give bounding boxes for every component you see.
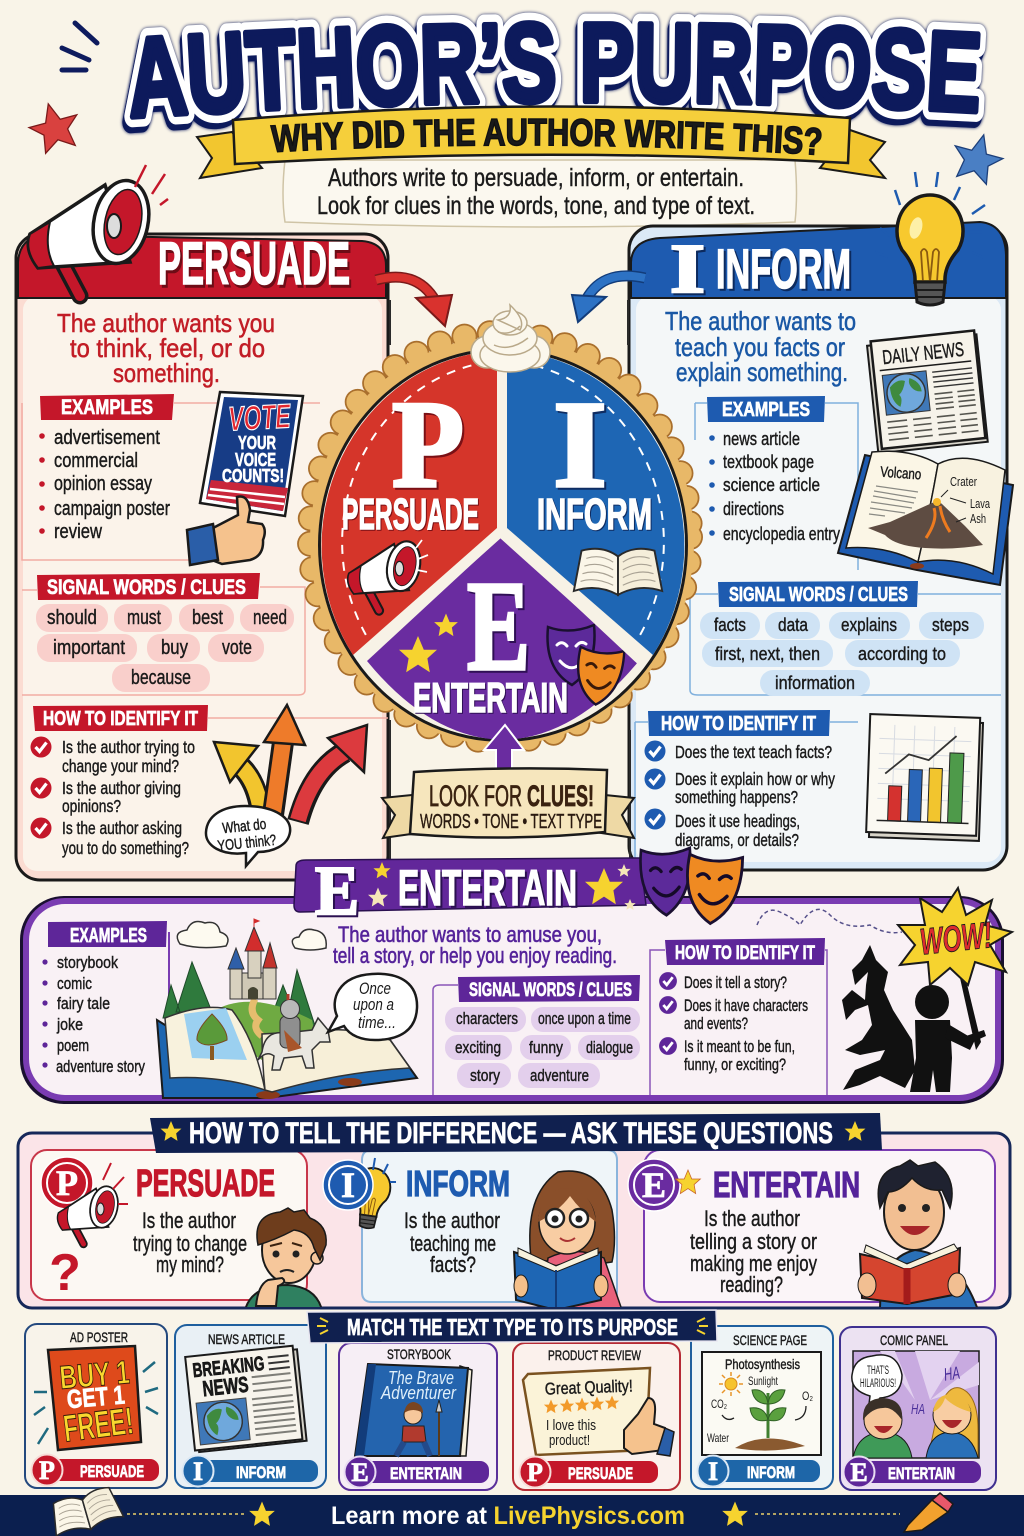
icon: theatre masks <box>640 848 743 926</box>
reading boy <box>858 1160 978 1310</box>
entertain examples list: poem <box>57 1036 89 1055</box>
title: AUTHOR’S PURPOSE <box>120 10 989 136</box>
speech bubble: what do you think <box>206 806 290 866</box>
persuade signal pills: best <box>192 607 223 629</box>
comic illustration <box>852 1351 979 1458</box>
intro text box: Look for clues in the words, tone, and type of text. <box>317 192 755 220</box>
photosynthesis illustration: Photosynthesis <box>725 1356 800 1372</box>
title: AUTHOR’S PURPOSE <box>130 20 981 120</box>
badge: E <box>642 1165 666 1205</box>
photosynthesis illustration: Sunlight <box>748 1374 778 1388</box>
pie dividers <box>360 380 642 664</box>
entertain examples list: joke <box>56 1015 83 1034</box>
vote poster: VOICE <box>235 450 276 470</box>
icon: star right <box>722 1502 748 1526</box>
reading girl <box>514 1171 622 1310</box>
newspaper illustration: NEWS <box>201 1372 250 1401</box>
how to identify tag <box>648 710 830 736</box>
inform signal pills: facts <box>714 614 746 635</box>
icon: pie open book <box>574 549 662 595</box>
icon: whipped cream <box>471 305 550 372</box>
slice: entertain <box>367 538 638 740</box>
inform examples list: encyclopedia entry <box>723 523 841 544</box>
inform signal pills: first, next, then <box>715 643 820 664</box>
banner: match the text type <box>307 1310 717 1343</box>
inform examples list: news article <box>723 428 800 449</box>
icon: bulb <box>349 1158 396 1231</box>
signal tag: SIGNAL WORDS / CLUES <box>469 979 632 1001</box>
persuade description: The author wants you <box>57 308 275 338</box>
check icons <box>659 972 677 1055</box>
badge: I <box>341 1165 355 1205</box>
silhouette: dragon and child <box>842 945 986 1092</box>
questions <box>62 737 195 858</box>
persuade examples list: opinion essay <box>54 473 152 495</box>
vote poster: YOUR <box>238 433 276 453</box>
questions: Does it tell a story? <box>684 974 787 992</box>
persuade signal pills <box>36 604 294 692</box>
heading: PERSUADE <box>136 1163 275 1205</box>
persuade signal pills: buy <box>161 637 188 659</box>
pie crust <box>310 333 694 745</box>
badge: inform <box>698 1456 820 1486</box>
comic kids <box>853 1432 912 1458</box>
ad poster illustration: BUY 1 <box>58 1353 131 1396</box>
knight on horse <box>258 994 330 1070</box>
icon: clouds <box>177 922 326 950</box>
storybook with castle and knight <box>157 919 417 1099</box>
comic illustration: HA <box>943 1363 961 1385</box>
question text: Is the author <box>704 1206 800 1231</box>
questions: Does the text teach facts? <box>675 742 832 762</box>
persuade description: to think, feel, or do <box>70 333 265 363</box>
badge: entertain <box>844 1456 981 1488</box>
card: science page: SCIENCE PAGE <box>733 1332 807 1348</box>
card: comic panel: COMIC PANEL <box>880 1332 948 1348</box>
inform description: explain something. <box>676 357 848 387</box>
card: ad poster <box>25 1324 167 1488</box>
persuade examples frame <box>22 403 320 560</box>
thinking boy <box>245 1208 326 1310</box>
icon: three direction arrows <box>214 705 367 822</box>
questions <box>675 742 835 850</box>
inform examples list: directions <box>723 498 784 519</box>
slice: entertain: E <box>467 555 530 697</box>
inform heading: I <box>670 231 705 308</box>
photosynthesis illustration <box>702 1352 821 1455</box>
inform examples list: textbook page <box>723 451 814 472</box>
speech bubble: once upon a time: upon a <box>353 995 394 1014</box>
badge: persuade: P <box>39 1456 55 1485</box>
inform signal tag <box>718 581 918 607</box>
thumbs up <box>624 1398 665 1454</box>
question text <box>690 1206 817 1297</box>
ad poster illustration: GET 1 <box>66 1379 126 1414</box>
slice: persuade <box>322 351 497 655</box>
persuade how to identify <box>30 705 388 858</box>
icon: megaphone <box>28 165 168 296</box>
panel: persuade <box>16 165 388 880</box>
persuade signal pills: must <box>127 607 161 629</box>
badge <box>628 1159 680 1211</box>
entertain examples list <box>42 953 145 1076</box>
card: product review: PRODUCT REVIEW <box>548 1347 642 1363</box>
speech bubble: once upon a time: time... <box>358 1013 396 1032</box>
icon: megaphone <box>58 1163 128 1244</box>
question text: making me enjoy <box>690 1251 817 1276</box>
tag: HOW TO IDENTIFY IT <box>675 943 815 964</box>
question text: Is the author <box>404 1208 500 1233</box>
panel: entertain <box>20 848 1012 1104</box>
questions: Is the author trying to <box>62 737 195 757</box>
inform description <box>665 306 856 387</box>
open book <box>157 1020 417 1098</box>
entertain header <box>294 858 646 912</box>
question text: trying to change <box>133 1231 247 1256</box>
inform signal pills <box>700 612 984 696</box>
storybook illustration: The Brave <box>388 1368 454 1388</box>
badge: inform: I <box>193 1457 203 1486</box>
footer text: Learn more at LivePhysics.com <box>331 1502 685 1530</box>
badge: entertain: E <box>351 1458 369 1487</box>
badge: inform: INFORM <box>236 1463 286 1482</box>
bar chart <box>866 714 983 841</box>
ribbon: why did the author write this <box>195 105 888 180</box>
speech bubble: what do you think: What do <box>222 816 267 837</box>
how to identify tag: HOW TO IDENTIFY IT <box>661 713 816 735</box>
questions <box>684 974 808 1074</box>
how to identify tag: HOW TO IDENTIFY IT <box>43 708 198 730</box>
persuade examples list: review <box>54 521 102 543</box>
inform heading <box>670 231 851 308</box>
questions: change your mind? <box>62 756 179 776</box>
persuade signal pills: because <box>131 667 191 689</box>
badge: persuade: PERSUADE <box>80 1462 144 1481</box>
slice: inform <box>507 351 684 655</box>
decorative sparks and stars <box>24 23 1008 187</box>
book illustration: volcano: Ash <box>970 512 986 526</box>
questions: Does it have characters <box>684 997 808 1015</box>
persuade signal box <box>22 573 305 695</box>
signal pills: adventure <box>530 1067 589 1085</box>
persuade description <box>57 308 275 388</box>
banner: how to tell the difference <box>150 1113 882 1153</box>
card: comic panel <box>840 1327 996 1490</box>
inform examples frame <box>695 403 858 570</box>
badge: entertain: ENTERTAIN <box>888 1464 955 1483</box>
signal pills: dialogue <box>586 1039 633 1057</box>
newspaper illustration: BREAKING <box>192 1353 265 1382</box>
question text: facts? <box>430 1252 476 1277</box>
icon: pencil <box>904 1493 953 1532</box>
question text <box>404 1208 500 1277</box>
newspaper illustration <box>185 1345 307 1452</box>
heading: ENTERTAIN <box>713 1164 860 1205</box>
entertain signal words <box>433 975 640 1095</box>
burst: wow <box>898 888 1012 985</box>
persuade examples list: campaign poster <box>54 498 170 520</box>
inform signal pills: explains <box>841 614 897 635</box>
arrow: up to pie <box>484 725 524 772</box>
how to identify tag <box>33 705 208 731</box>
entertain examples tag: EXAMPLES <box>70 925 147 947</box>
persuade examples list: advertisement <box>54 427 160 449</box>
castle <box>228 919 277 999</box>
intro text box: Authors write to persuade, inform, or entertain. <box>328 164 744 192</box>
review illustration: product! <box>549 1433 590 1449</box>
book illustration: volcano <box>838 451 1013 585</box>
badge: persuade <box>32 1454 159 1486</box>
inform heading: INFORM <box>716 237 851 300</box>
intro text box <box>283 160 796 227</box>
questions: Is it meant to be fun, <box>684 1038 795 1056</box>
icon: lightbulb <box>875 172 985 305</box>
vote poster: COUNTS! <box>222 466 284 486</box>
frame line <box>168 932 170 1010</box>
vote poster: VOTE <box>227 397 292 439</box>
questions: Is the author asking <box>62 818 182 838</box>
slice: persuade: PERSUADE <box>342 490 479 539</box>
inform signal pills: according to <box>858 643 946 664</box>
slice: inform: INFORM <box>537 490 652 539</box>
card: ad poster: AD POSTER <box>70 1329 128 1345</box>
questions: opinions? <box>62 796 121 816</box>
photosynthesis illustration: O₂ <box>802 1389 813 1403</box>
persuade signal pills: need <box>253 607 287 629</box>
book illustration: volcano: Lava <box>970 497 990 511</box>
persuade signal pills: vote <box>222 637 252 659</box>
questions: Is the author giving <box>62 778 181 798</box>
divider lines between panels <box>390 300 630 860</box>
card: inform question <box>323 1150 622 1310</box>
trees <box>163 962 318 1035</box>
entertain examples list: adventure story <box>56 1057 145 1076</box>
question mark: ? <box>49 1244 81 1302</box>
badge: inform: INFORM <box>747 1463 795 1482</box>
newspaper: daily news: DAILY NEWS <box>881 339 965 369</box>
entertain description: tell a story, or help you enjoy reading. <box>333 943 617 968</box>
questions: funny, or exciting? <box>684 1056 786 1074</box>
slice: persuade: P <box>392 376 464 513</box>
vote poster <box>200 392 303 516</box>
footer <box>0 1485 1024 1536</box>
entertain description <box>333 922 617 968</box>
persuade description: something. <box>113 358 220 388</box>
badge: persuade <box>520 1456 658 1488</box>
badge: persuade: P <box>527 1458 543 1487</box>
question text: teaching me <box>410 1231 496 1256</box>
panel: inform <box>629 172 1013 870</box>
icon: theatre masks <box>548 625 625 708</box>
badge <box>323 1160 373 1210</box>
inform signal box <box>690 581 1001 696</box>
comic illustration: HILARIOUS! <box>860 1378 896 1390</box>
signal pills <box>445 1007 640 1088</box>
check icons <box>644 740 666 830</box>
icon: star left <box>249 1502 275 1526</box>
speech bubble: once upon a time <box>328 974 417 1040</box>
inform header <box>631 222 1006 298</box>
card: news article <box>175 1325 326 1488</box>
book illustration: volcano: Volcano <box>880 464 922 483</box>
question text: telling a story or <box>690 1229 817 1254</box>
card: entertain question <box>628 1150 995 1310</box>
persuade signal pills: should <box>47 607 97 629</box>
badge: persuade: PERSUADE <box>568 1464 633 1483</box>
badge <box>41 1157 93 1209</box>
signal tag <box>458 975 640 1002</box>
dotted line right <box>755 1513 900 1515</box>
questions: Does it explain how or why <box>675 769 835 789</box>
panel: how to tell the difference <box>18 1133 1010 1310</box>
badge: entertain <box>344 1456 489 1488</box>
inform how to identify <box>635 710 858 860</box>
icon: star <box>676 1170 700 1194</box>
questions: you to do something? <box>62 838 189 858</box>
inform signal pills: data <box>778 614 809 635</box>
card: science page <box>691 1326 833 1489</box>
entertain how to identify <box>650 938 827 1095</box>
persuade heading: PERSUADE <box>158 230 350 297</box>
comic illustration: THAT'S <box>867 1365 889 1377</box>
inform signal pills: information <box>775 672 855 693</box>
card: storybook <box>339 1343 497 1490</box>
tag <box>665 938 825 965</box>
inform signal pills: steps <box>932 614 969 635</box>
questions: and events? <box>684 1015 748 1033</box>
questions: Does it use headings, <box>675 811 800 831</box>
signal pills: exciting <box>455 1039 501 1057</box>
newspaper: daily news <box>867 330 988 453</box>
question text: Is the author <box>142 1208 236 1233</box>
entertain examples list: fairy tale <box>57 994 110 1013</box>
entertain examples tag <box>48 921 167 947</box>
banner: look for clues: WORDS • TONE • TEXT TYPE <box>420 811 602 833</box>
banner: match the text type: MATCH THE TEXT TYPE TO ITS PURPOSE <box>347 1314 678 1340</box>
signal pills: once upon a time <box>538 1010 631 1028</box>
photosynthesis illustration: Water <box>707 1431 729 1445</box>
storybook illustration <box>355 1364 472 1456</box>
ad poster illustration: FREE! <box>61 1400 136 1451</box>
arrow: persuade to pie <box>376 277 452 326</box>
inform examples tag: EXAMPLES <box>722 399 810 421</box>
persuade signal tag: SIGNAL WORDS / CLUES <box>47 576 246 599</box>
question text: reading? <box>720 1272 783 1297</box>
badge: entertain: ENTERTAIN <box>390 1464 462 1483</box>
signal pills: characters <box>456 1010 518 1028</box>
entertain heading: ENTERTAIN <box>398 860 577 916</box>
speech bubble: once upon a time: Once <box>359 979 391 998</box>
speech bubble: what do you think: YOU think? <box>217 832 277 855</box>
book illustration: volcano: Crater <box>950 475 977 489</box>
question text <box>133 1208 247 1277</box>
questions: something happens? <box>675 787 798 807</box>
slice: inform: I <box>553 376 607 513</box>
dotted flight path <box>757 909 902 933</box>
badge: inform <box>182 1456 318 1486</box>
icon: thumbs up hand <box>187 497 265 565</box>
banner: look for clues: LOOK FOR CLUES! <box>429 780 594 813</box>
card: news article: NEWS ARTICLE <box>208 1331 285 1347</box>
arrow: inform to pie <box>572 276 645 322</box>
persuade examples list <box>39 427 170 543</box>
heading: INFORM <box>406 1163 510 1204</box>
badge: inform: I <box>708 1457 718 1486</box>
review illustration: Great Quality! <box>545 1377 633 1399</box>
entertain description: The author wants to amuse you, <box>338 922 602 947</box>
icon: footer book <box>47 1485 124 1536</box>
check icons <box>30 736 52 838</box>
badge: entertain: E <box>850 1458 868 1487</box>
dotted line left <box>127 1513 245 1515</box>
pie chart: author's purpose <box>310 305 694 745</box>
questions: diagrams, or details? <box>675 830 799 850</box>
question text: my mind? <box>156 1252 224 1277</box>
review illustration <box>523 1368 674 1456</box>
ad poster illustration <box>34 1346 158 1451</box>
comic illustration: HA <box>911 1401 925 1418</box>
entertain heading: E <box>315 853 359 930</box>
signal pills: story <box>470 1067 501 1085</box>
entertain examples list: storybook <box>57 953 118 972</box>
banner: look for clues <box>382 768 634 838</box>
card: product review <box>513 1343 680 1490</box>
inform signal tag: SIGNAL WORDS / CLUES <box>729 584 908 606</box>
persuade header <box>18 235 386 298</box>
card: persuade question <box>31 1150 326 1310</box>
inform description: teach you facts or <box>675 332 845 362</box>
persuade examples list: commercial <box>54 450 138 472</box>
icon: pie megaphone <box>348 538 425 611</box>
review illustration: I love this <box>546 1418 596 1434</box>
inform examples list: science article <box>723 474 820 495</box>
persuade signal pills: important <box>53 637 125 659</box>
ribbon: why did the author write this: WHY DID THE AUTHOR WRITE THIS? <box>270 118 822 156</box>
signal pills: funny <box>529 1039 564 1057</box>
card: storybook: STORYBOOK <box>387 1346 451 1362</box>
persuade examples tag: EXAMPLES <box>61 396 153 419</box>
inform description: The author wants to <box>665 306 856 336</box>
inform examples list <box>709 428 841 544</box>
storybook illustration: Adventurer <box>380 1383 457 1403</box>
badge: P <box>56 1163 78 1203</box>
entertain heading <box>315 853 636 930</box>
slice: entertain: ENTERTAIN <box>413 674 568 721</box>
photosynthesis illustration: CO₂ <box>711 1397 727 1411</box>
entertain examples list: comic <box>57 974 92 993</box>
